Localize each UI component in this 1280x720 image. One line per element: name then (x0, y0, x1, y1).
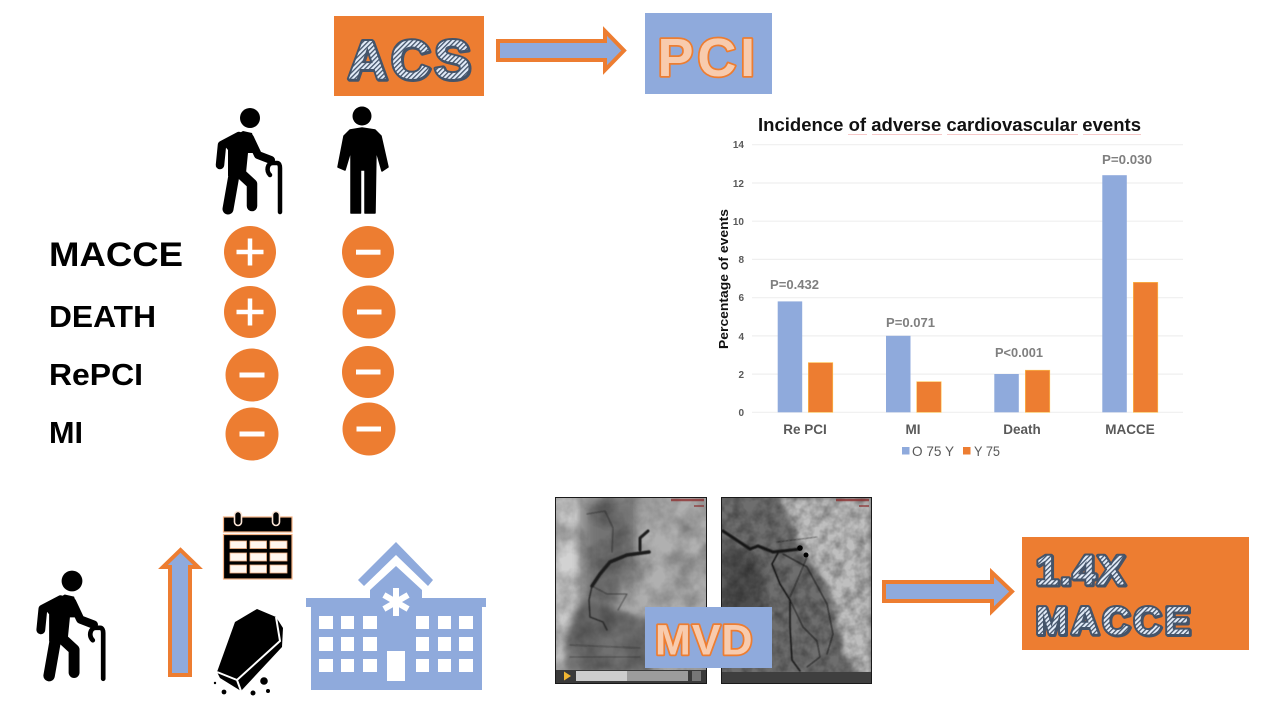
row: MACCE: MACCE (49, 236, 183, 274)
y axis labels (733, 140, 744, 419)
PCI box (645, 13, 772, 94)
result box: 1.4X MACCE: 1.4X (1036, 546, 1126, 594)
category labels: MACCE (1105, 422, 1155, 437)
panel: outcome table by age (49, 106, 396, 460)
icon: hospital (306, 542, 486, 690)
flow: ACS to PCI (334, 13, 772, 96)
result box: 1.4X MACCE (1022, 537, 1249, 650)
bar chart: incidence of adverse cardiovascular events (717, 115, 1183, 459)
row: DEATH (49, 286, 396, 338)
older: plus (224, 226, 276, 278)
row: MI: MI (49, 415, 83, 450)
older: minus (226, 348, 278, 402)
row: MI (49, 402, 396, 460)
legend (902, 443, 1000, 459)
y axis labels: 0 (738, 408, 744, 419)
category labels: Re PCI (783, 422, 827, 437)
icon: elderly person with cane (220, 108, 280, 212)
p values: P<0.001 (995, 345, 1043, 360)
bars: O 75 Y (778, 175, 1127, 412)
bars: Y 75 (808, 282, 1158, 412)
arrow: increase (163, 550, 198, 675)
p values: P=0.030 (1102, 152, 1152, 167)
y axis labels: 12 (733, 179, 744, 190)
legend: Y 75 (974, 443, 1000, 459)
younger: minus (342, 226, 394, 278)
result box: 1.4X MACCE: MACCE (1036, 600, 1194, 643)
y axis labels: 4 (738, 332, 744, 343)
y axis labels: 8 (738, 255, 744, 266)
icon: elderly person with cane (41, 571, 103, 679)
icon: coffin (214, 609, 283, 696)
category labels (783, 422, 1155, 437)
legend: O 75 Y (912, 443, 955, 459)
ACS box: ACS (348, 28, 474, 90)
younger: minus (342, 286, 396, 338)
younger: minus (342, 402, 396, 456)
panel: age raises mortality and hospital stay (41, 512, 486, 696)
p values: P=0.071 (886, 315, 935, 330)
PCI box: PCI (658, 28, 759, 88)
younger: minus (342, 346, 394, 398)
arrow: ACS to PCI (498, 31, 624, 70)
row: DEATH: DEATH (49, 299, 156, 334)
chart title: Incidence of adverse cardiovascular events (758, 115, 1141, 135)
icon: younger person (338, 106, 388, 213)
y axis labels: 2 (738, 370, 744, 381)
panel: angiograms and MVD outcome (555, 497, 1249, 684)
category labels: MI (906, 422, 920, 437)
image: right coronary angiogram (721, 497, 872, 684)
p values: P=0.432 (770, 277, 819, 292)
y axis labels: 10 (733, 217, 744, 228)
y axis labels: 6 (738, 293, 744, 304)
MVD box: MVD (655, 616, 754, 664)
row: RePCI: RePCI (49, 357, 143, 392)
category labels: Death (1003, 422, 1041, 437)
MVD box (645, 607, 772, 668)
icon: calendar (224, 512, 292, 579)
ACS box (334, 16, 484, 96)
arrow: MVD to MACCE (884, 572, 1012, 611)
older: plus (224, 286, 276, 338)
p values (770, 152, 1152, 360)
image: left coronary angiogram (555, 497, 707, 684)
older: minus (226, 408, 278, 460)
y axis labels: 14 (733, 140, 744, 151)
row: MACCE (49, 226, 394, 278)
y axis title: Percentage of events (717, 209, 731, 349)
row: RePCI (49, 346, 394, 402)
